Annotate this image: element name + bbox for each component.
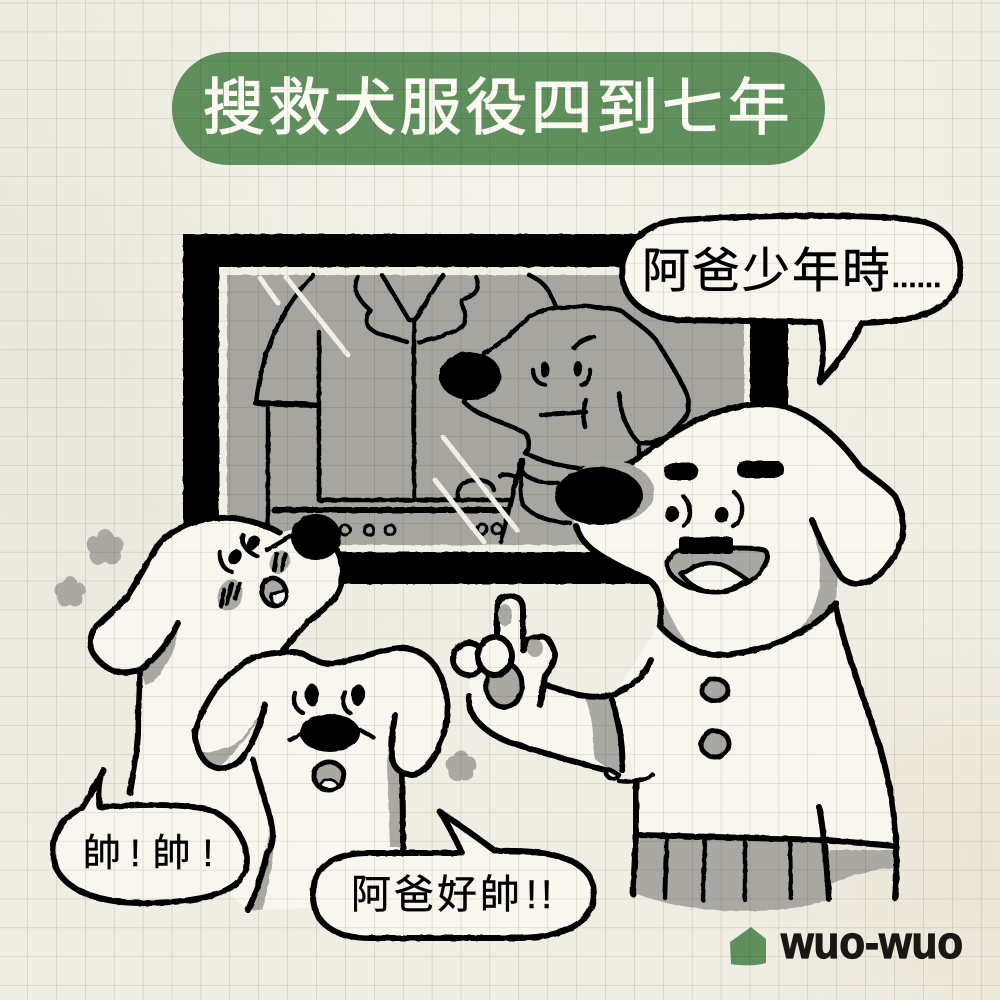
dog 2 body and head (195, 648, 448, 910)
logo (730, 917, 963, 968)
dad brows (664, 461, 784, 480)
dog 1 body and head (90, 518, 342, 912)
dog 1 outline (90, 518, 343, 672)
dad nose (555, 461, 654, 525)
building with awning on screen (256, 275, 319, 525)
decorative flower left lower (54, 576, 86, 606)
young dog on screen (439, 275, 689, 523)
wordmark: wuo-wuo (780, 917, 963, 968)
dog 1 neck line (130, 670, 140, 793)
tree on screen (355, 275, 478, 497)
dad eyes (665, 492, 742, 526)
left dog looking up (90, 514, 343, 912)
front dog (195, 648, 448, 910)
screen glare (260, 277, 517, 542)
dad hand (453, 596, 555, 707)
television (183, 234, 788, 584)
speech bubble top right (622, 216, 960, 382)
dog 2 outline (195, 648, 448, 774)
title banner: 搜救犬服役四到七年 (203, 74, 793, 143)
bubble text: handsome: 帥! 帥 ! (83, 833, 213, 875)
big dad dog (453, 404, 903, 911)
dog 1 nose (291, 514, 341, 560)
dad head (555, 404, 903, 655)
title banner (172, 52, 825, 165)
bubble text: father's youth: 阿爸少年時...... (642, 245, 942, 298)
speech bubble left (53, 770, 247, 903)
bubble text: dad is so handsome: 阿爸好帥!! (351, 873, 556, 917)
dad open mouth and moustache (667, 537, 768, 592)
dog 2 shadows (203, 707, 403, 910)
decorative flower centre (446, 750, 476, 780)
dog 2 face (290, 684, 373, 790)
window sill and console on screen (274, 460, 521, 542)
speech bubble bottom (313, 812, 594, 938)
decorative flower left upper (86, 530, 124, 564)
icon: green house (730, 927, 766, 965)
dog 1 face (213, 533, 294, 614)
dog 1 ear shadow (142, 623, 178, 685)
floor shadow and hem (633, 835, 893, 911)
dad arm (469, 629, 660, 782)
dad body (612, 605, 897, 900)
